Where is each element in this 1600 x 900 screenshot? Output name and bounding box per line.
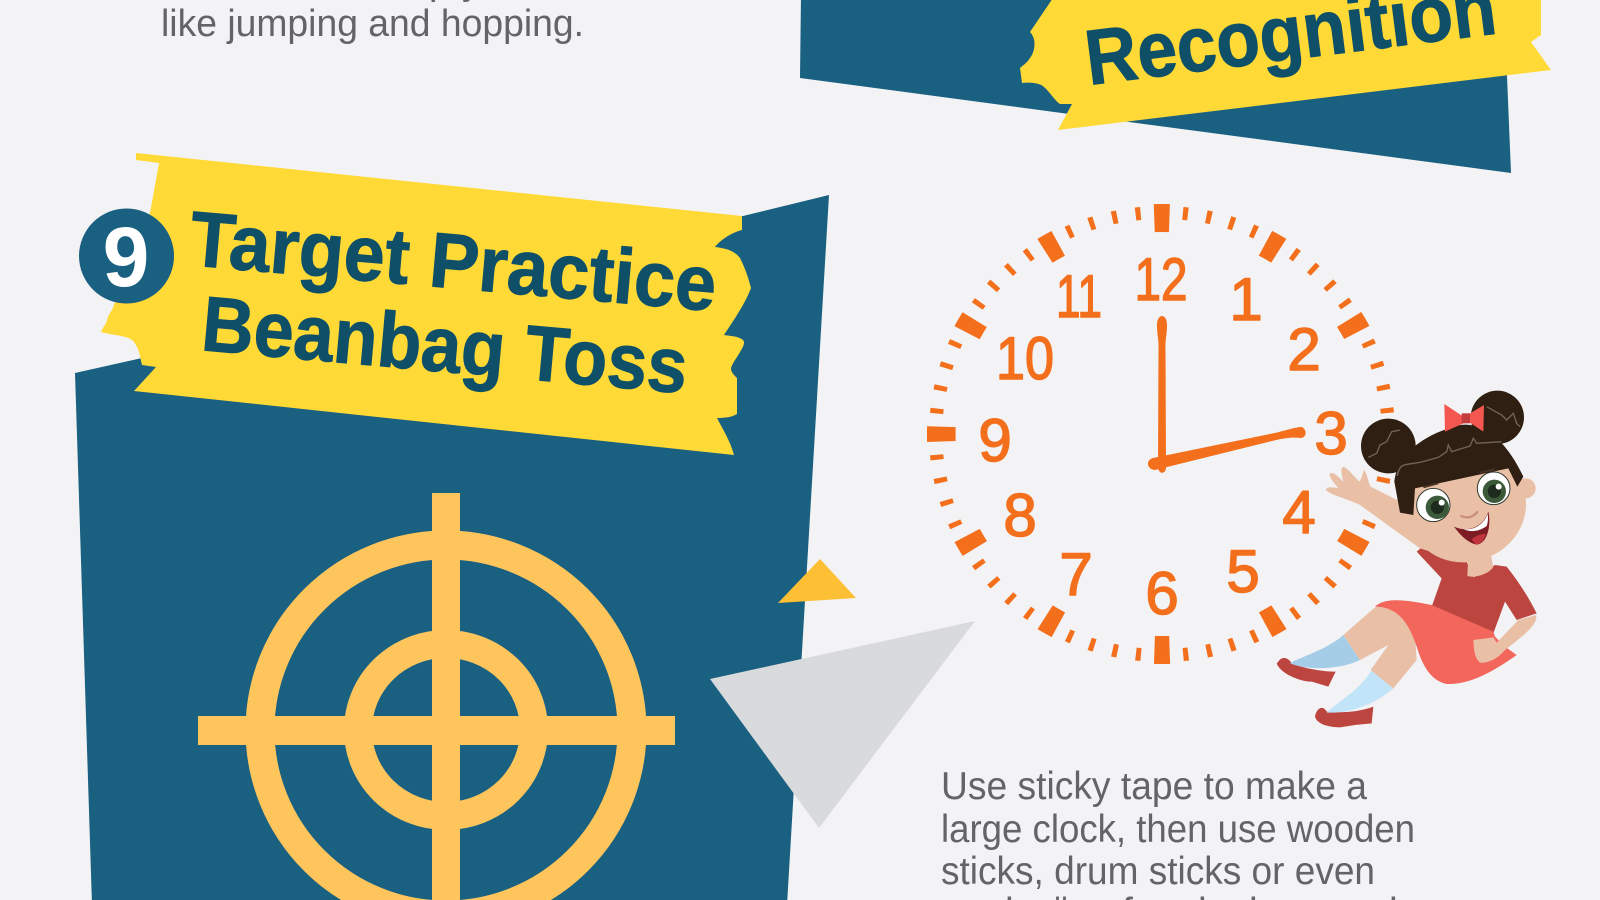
clock numerals: 12 <box>1134 246 1188 313</box>
icon: crosshair target <box>198 493 675 900</box>
girl mouth <box>1454 512 1489 545</box>
text block: clock activity instructions: sticks, drum sticks or even <box>941 850 1375 893</box>
girl legs and socks <box>1277 606 1417 727</box>
clock numerals: 3 <box>1314 400 1348 467</box>
clock numerals <box>978 246 1348 627</box>
panel: recognition activity <box>800 0 1551 173</box>
clock tick marks <box>936 212 1388 656</box>
clock numerals: 4 <box>1282 479 1316 546</box>
clock numerals: 2 <box>1287 316 1321 383</box>
clock numerals: 1 <box>1229 266 1263 333</box>
heading tape: Target Practice Beanbag Toss <box>101 153 751 455</box>
girl eyes <box>1417 469 1510 522</box>
clock numerals: 5 <box>1226 538 1260 605</box>
text block: clock activity instructions: Use sticky tape to make a <box>941 765 1367 808</box>
decorative triangle: yellow <box>778 559 856 603</box>
girl hair bow <box>1444 404 1484 432</box>
number badge: 9 <box>79 208 174 304</box>
text block: clock activity instructions <box>941 765 1415 900</box>
clock <box>936 212 1388 656</box>
clock minute hand <box>1157 316 1167 473</box>
heading tape: Target Practice Beanbag Toss: Target Practice <box>187 194 720 328</box>
clock numerals: 10 <box>996 325 1054 392</box>
girl hair buns <box>1361 391 1524 473</box>
girl nose <box>1461 512 1477 517</box>
illustration: girl sitting beside clock <box>1277 391 1541 727</box>
girl dress <box>1375 546 1537 684</box>
girl hair <box>1394 425 1523 515</box>
number badge: 9: 9 <box>103 210 149 304</box>
decorative triangle: grey <box>710 621 975 828</box>
heading tape: Target Practice Beanbag Toss: Beanbag Toss <box>198 279 691 410</box>
text block: end of previous activity: like jumping and hopping. <box>161 3 584 45</box>
clock numerals: 9 <box>978 407 1012 474</box>
girl head <box>1393 438 1541 579</box>
heading tape: Recognition <box>1020 0 1551 130</box>
panel: target practice <box>75 153 829 900</box>
text block: clock activity instructions: large clock, then use wooden <box>941 808 1415 851</box>
girl arms <box>1326 467 1536 663</box>
clock hour hand <box>1148 427 1306 470</box>
clock numerals: 7 <box>1059 541 1093 608</box>
clock numerals: 8 <box>1003 482 1037 549</box>
clock numerals: 11 <box>1056 263 1102 330</box>
girl hair highlights <box>1368 407 1520 476</box>
clock numerals: 6 <box>1145 560 1179 627</box>
